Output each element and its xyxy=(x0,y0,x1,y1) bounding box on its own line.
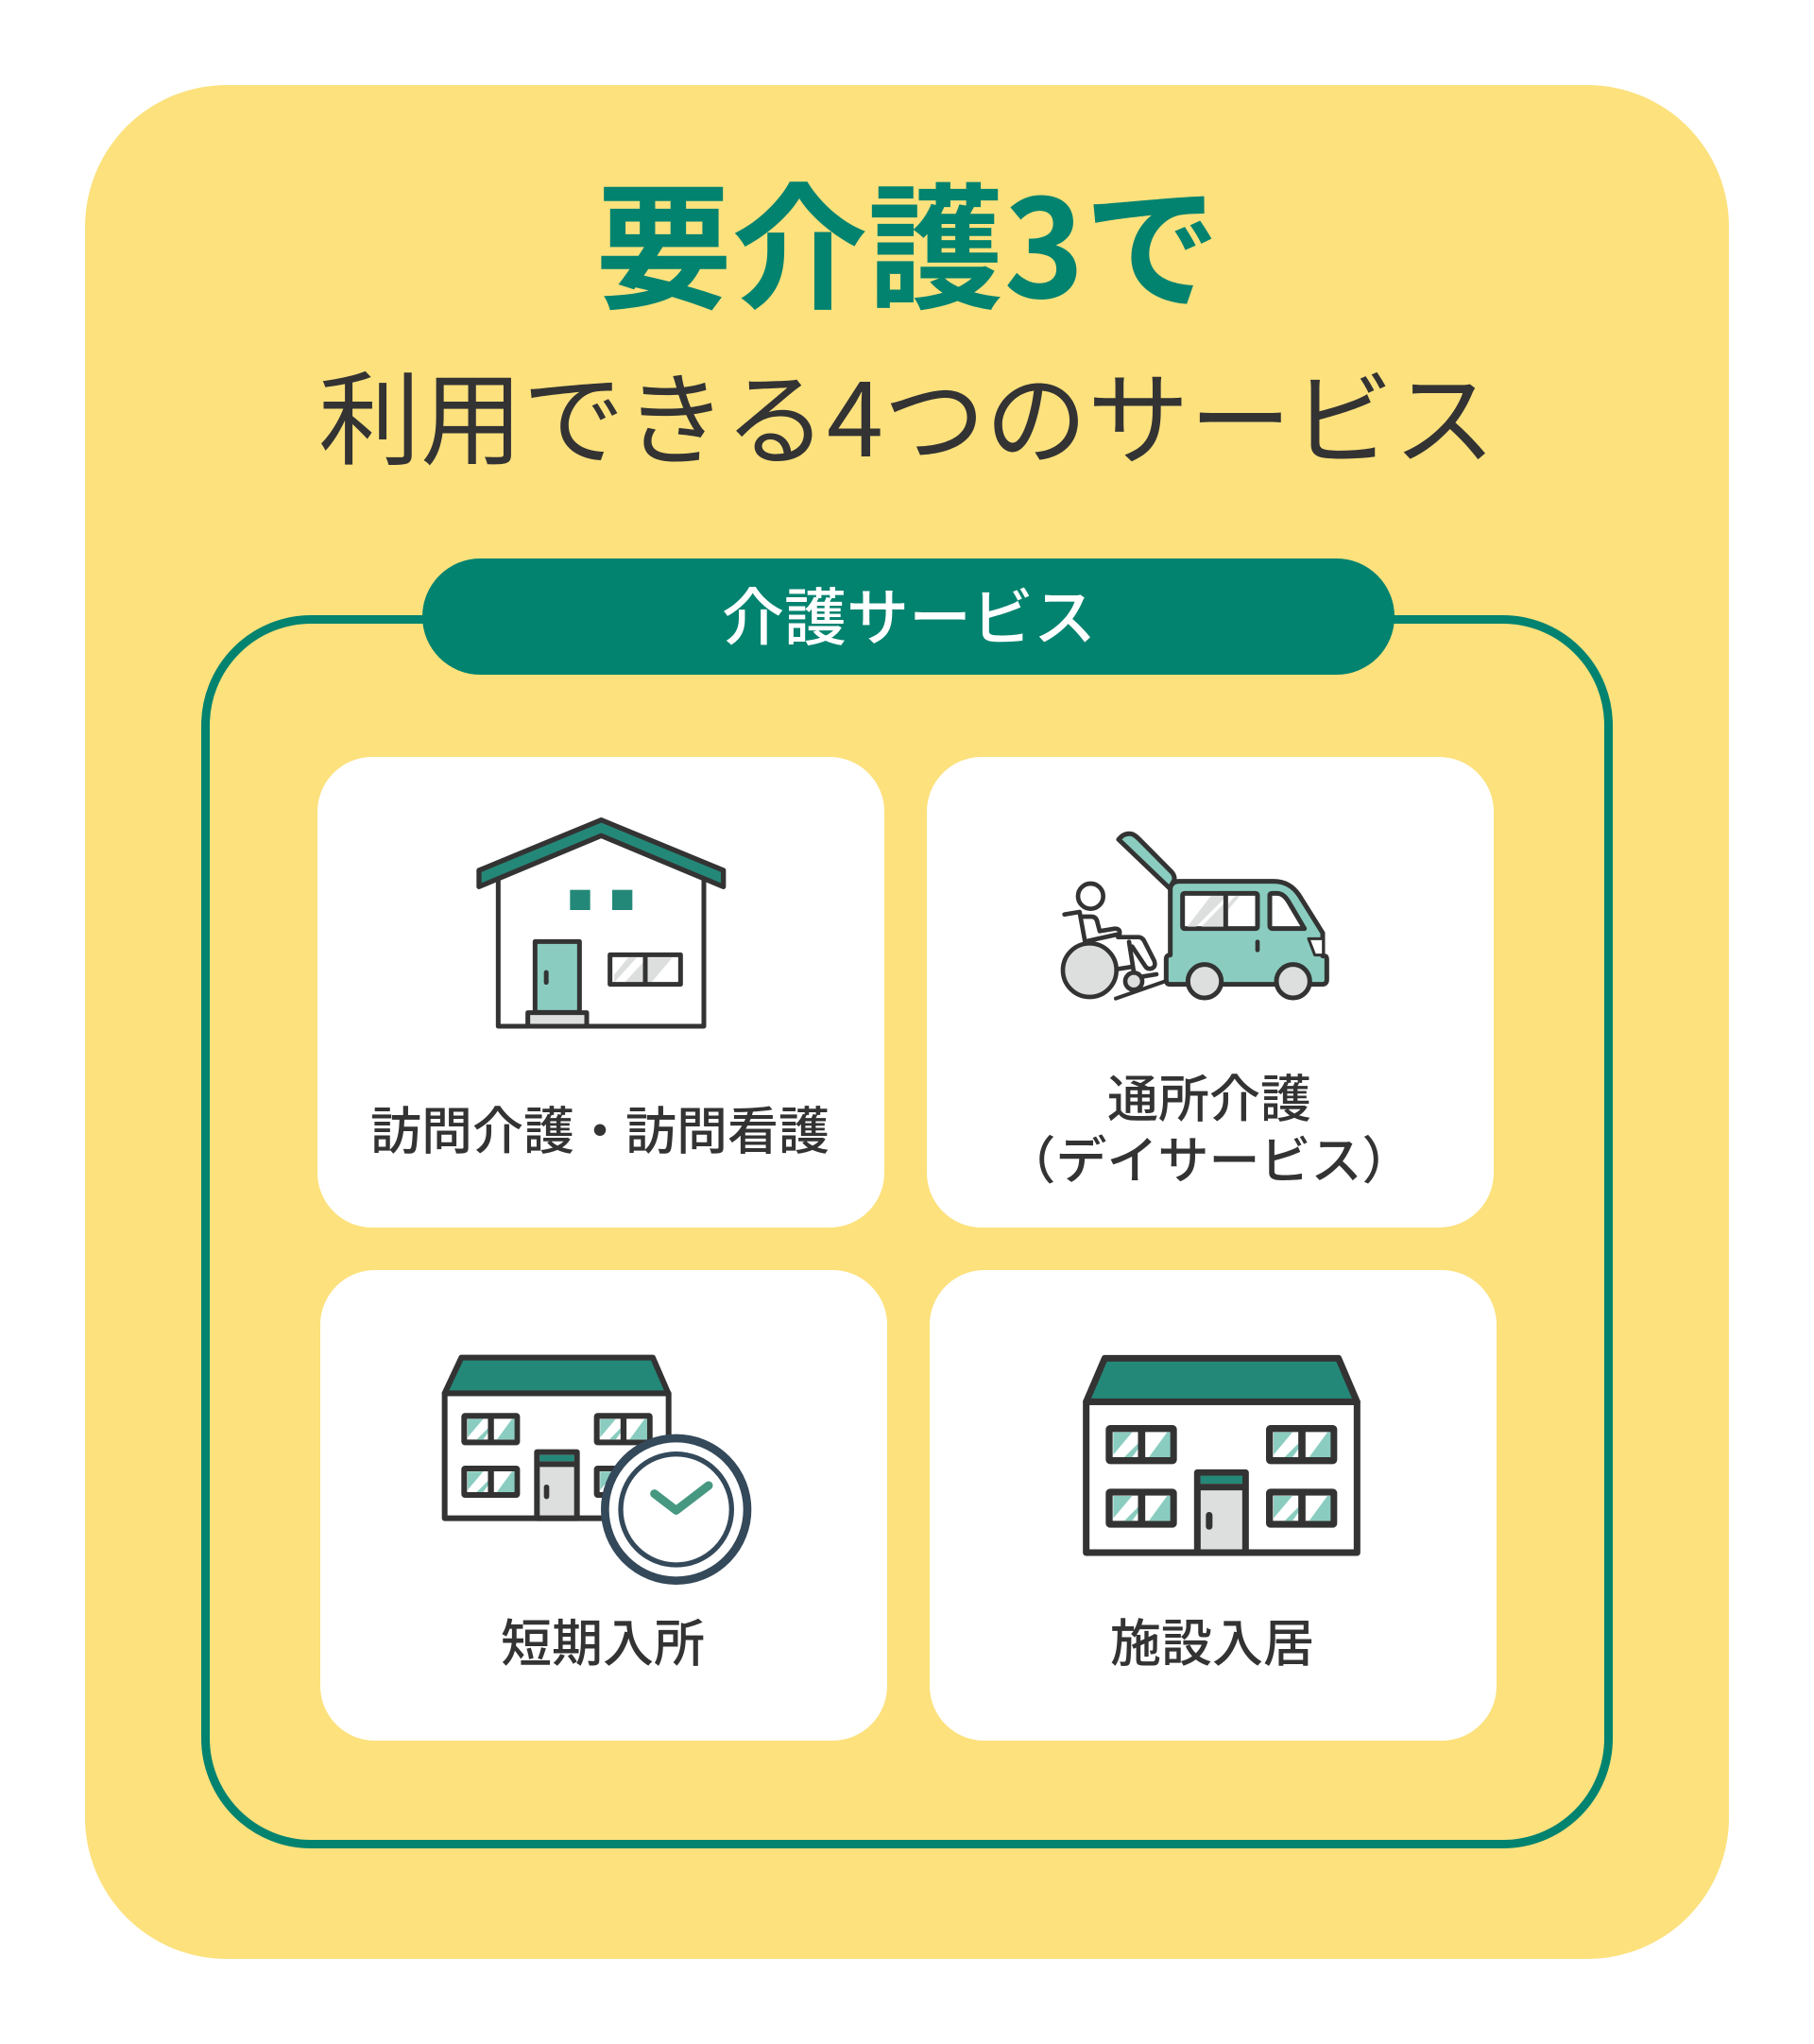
icon: house xyxy=(479,820,724,1026)
label: 通所介護（デイサービス）: （デイサービス） xyxy=(1005,1119,1413,1194)
label: 通所介護（デイサービス）: 通所介護 xyxy=(1107,1057,1311,1132)
heading pill: 介護サービス xyxy=(422,558,1395,675)
card: day service xyxy=(927,757,1494,1228)
heading pill: 介護サービス: 介護サービス xyxy=(722,568,1096,659)
subtitle: 利用できる4つのサービス: 利用できる4つのサービス xyxy=(318,339,1496,487)
icon: facility building xyxy=(1087,1358,1357,1553)
card: home visit care xyxy=(317,757,884,1228)
panel: service group outline xyxy=(206,620,1608,1845)
card: facility residence xyxy=(930,1270,1497,1741)
icon: building with clock xyxy=(445,1358,747,1581)
label: 通所介護（デイサービス） xyxy=(1005,1057,1413,1194)
card: short stay xyxy=(320,1270,887,1741)
label: 施設入居: 施設入居 xyxy=(1110,1602,1314,1676)
title: 要介護3で: 要介護3で xyxy=(596,141,1220,337)
icon: wheelchair van xyxy=(1063,833,1326,999)
label: 訪問介護・訪問看護: 訪問介護・訪問看護 xyxy=(370,1090,830,1164)
label: 短期入所: 短期入所 xyxy=(501,1602,705,1676)
